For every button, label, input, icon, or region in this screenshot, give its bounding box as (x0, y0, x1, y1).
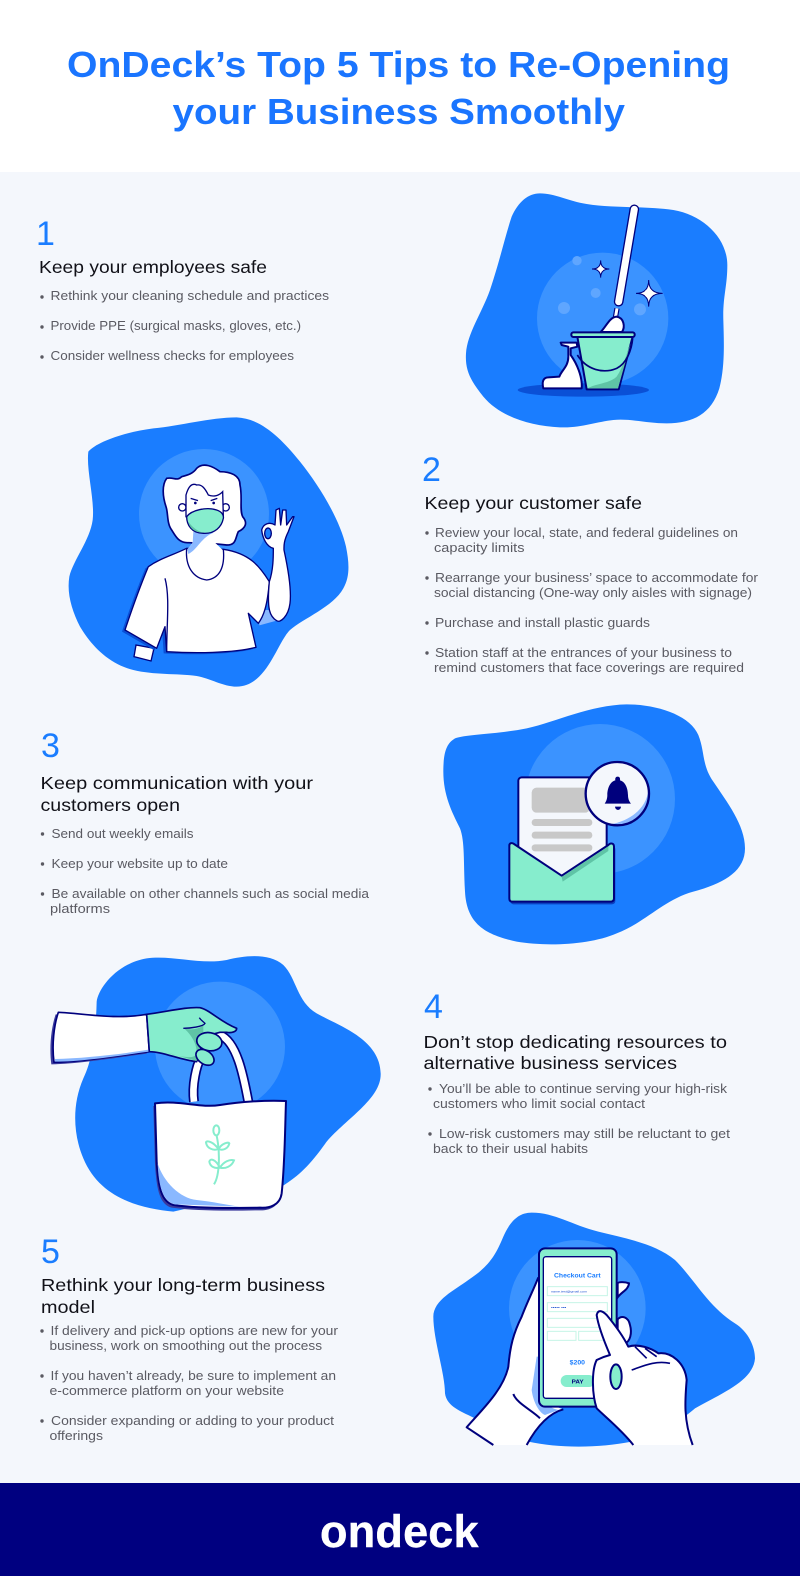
heading: keep employees safe: Keep your employees safe (39, 257, 267, 277)
logo wordmark: ondeck (320, 1506, 480, 1557)
bullet list: Provide PPE (surgical masks, gloves, etc.) (50, 318, 301, 333)
bullet list: Be available on other channels such as social media (52, 886, 370, 901)
title: your Business Smoothly (172, 91, 625, 132)
bullet list: capacity limits (434, 540, 525, 555)
bullet list (428, 1081, 730, 1156)
bullet list: Rearrange your business’ space to accommodate for (435, 570, 759, 585)
bullet list: platforms (50, 901, 111, 916)
heading: keep customer safe: Keep your customer safe (424, 493, 642, 513)
bullet list: You’ll be able to continue serving your high-risk (439, 1081, 728, 1096)
bullet list: Review your local, state, and federal guidelines on (435, 525, 738, 540)
bullet list: Purchase and install plastic guards (435, 615, 651, 630)
bullet list (41, 826, 370, 916)
bullet list: If you haven’t already, be sure to implement an (50, 1368, 336, 1383)
bullet list (40, 1323, 339, 1443)
bullet list: Station staff at the entrances of your business to (435, 645, 732, 660)
panel: tip 5 text: model (41, 1297, 95, 1317)
bullet list: Rethink your cleaning schedule and practices (50, 288, 330, 303)
heading: alternative business services: Don’t stop dedicating resources to (424, 1032, 727, 1052)
illustration: hands with checkout phone: PAY (572, 1379, 584, 1385)
heading: rethink business model: Rethink your long-term business (41, 1275, 325, 1295)
illustration: mop and bucket (466, 193, 727, 427)
bullet list: Send out weekly emails (52, 826, 194, 841)
bullet list: e-commerce platform on your website (50, 1383, 284, 1398)
bullet list: customers who limit social contact (433, 1096, 645, 1111)
panel: tip 1 text (36, 215, 330, 363)
bullet list: remind customers that face coverings are required (434, 660, 744, 675)
bullet list: offerings (50, 1428, 104, 1443)
panel: tip 5 text (40, 1233, 339, 1443)
illustration: envelope and bell (443, 704, 745, 944)
bullet list: If delivery and pick-up options are new for your (50, 1323, 339, 1338)
number 1: 1 (36, 215, 55, 253)
illustration: hands with checkout phone (433, 1213, 755, 1447)
bullet list: Consider wellness checks for employees (50, 348, 295, 363)
illustration: hands with checkout phone: Checkout Cart (554, 1273, 601, 1279)
illustration: hands with checkout phone: $200 (570, 1361, 586, 1367)
bullet list: Keep your website up to date (52, 856, 228, 871)
panel: tip 4 text: alternative business services (424, 1053, 677, 1073)
heading: keep communication open: Keep communication with your (40, 773, 313, 793)
bullet list: Low-risk customers may still be reluctant to get (439, 1126, 730, 1141)
footer band (0, 1483, 800, 1576)
illustration: hands with checkout phone: ••••• ••• (551, 1306, 568, 1310)
illustration: hand holding tote bag (50, 956, 381, 1212)
panel: tip 3 text (40, 727, 370, 916)
bullet list: Consider expanding or adding to your product (51, 1413, 334, 1428)
panel: tip 4 text (424, 988, 730, 1156)
title (67, 44, 730, 132)
bullet list (40, 288, 330, 363)
number 4: 4 (424, 988, 443, 1026)
number 3: 3 (41, 727, 60, 765)
title: OnDeck’s Top 5 Tips to Re-Opening (67, 44, 730, 85)
number 5: 5 (41, 1233, 60, 1271)
panel: tip 2 text (422, 451, 759, 675)
number 2: 2 (422, 451, 441, 489)
bullet list (425, 525, 759, 675)
panel: tip 3 text: customers open (40, 795, 180, 815)
bullet list: business, work on smoothing out the process (50, 1338, 323, 1353)
illustration: person with mask (69, 417, 348, 687)
bullet list: back to their usual habits (433, 1141, 589, 1156)
bullet list: social distancing (One-way only aisles with signage) (434, 585, 752, 600)
illustration: hands with checkout phone: name.test@gmail.com (551, 1289, 588, 1293)
